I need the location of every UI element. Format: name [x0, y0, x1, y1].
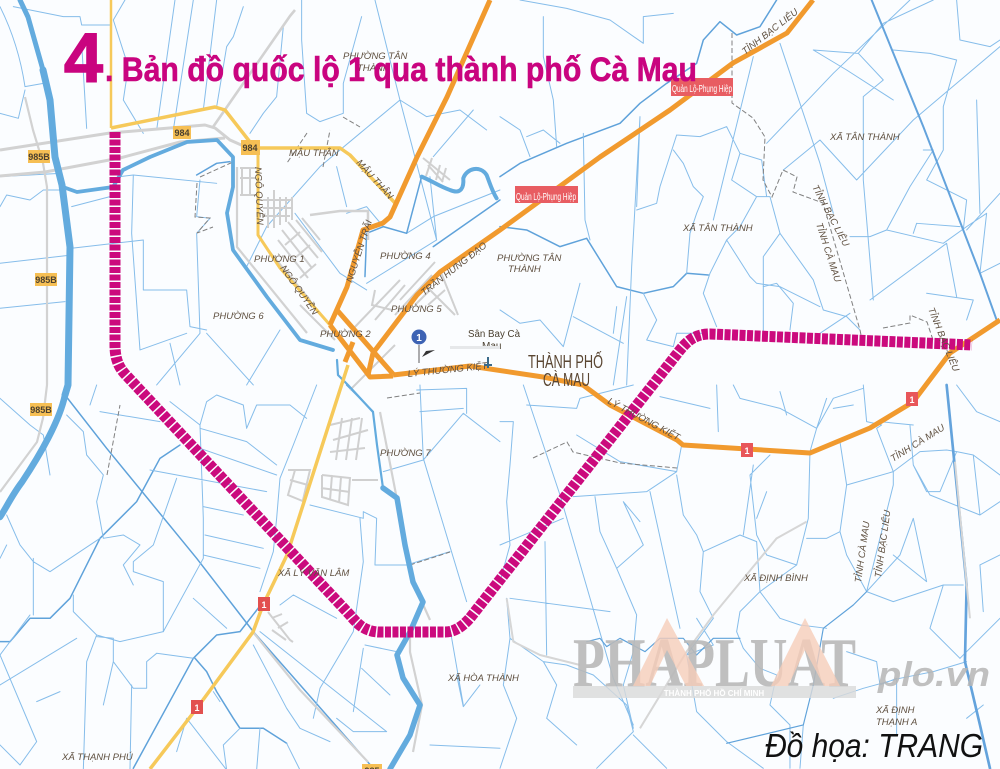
road number shields: [28, 126, 918, 769]
road number shields: 984: [242, 143, 258, 153]
road number shields: 1: [744, 446, 750, 456]
canal network: north-east: [500, 0, 1000, 385]
place labels: PHƯỜNG 1: [254, 254, 305, 265]
red road labels: Quản Lộ-Phụng Hiệp: [672, 84, 732, 95]
main rivers: [0, 0, 423, 769]
place labels: XÃ ĐỊNH: [875, 705, 915, 716]
yellow provincial roads: [111, 0, 395, 769]
place labels: THÀNH: [508, 264, 541, 275]
canal network: north-west: [0, 0, 500, 385]
grey roads: [0, 10, 430, 762]
road number shields: 985B: [35, 275, 57, 285]
watermark logo: Pháp Luật: plo.vn: [877, 656, 990, 694]
canal network: south-west: [0, 385, 500, 769]
place labels: PHƯỜNG 2: [320, 329, 371, 340]
urban street grid: [240, 158, 458, 642]
place labels: TỈNH CÀ MAU: [813, 221, 844, 284]
place labels: THÀNH PHỐ: [528, 351, 603, 372]
place labels: TỈNH CÀ MAU: [852, 520, 873, 583]
title: . Bản đồ quốc lộ 1 qua thành phố Cà Mau: [105, 51, 697, 89]
place labels: PHƯỜNG 5: [391, 304, 442, 315]
place labels: MẬU THÂN: [289, 148, 339, 159]
place labels: NGÔ QUYỀN: [252, 167, 265, 225]
place labels: Sân Bay Cà: [468, 329, 520, 340]
watermark logo: Pháp Luật: PHAPLUAT: [573, 625, 856, 702]
place labels: TỈNH BẠC LIÊU: [809, 183, 852, 249]
place labels: XÃ HÒA THÀNH: [447, 673, 519, 684]
road number shields: 1: [909, 395, 915, 405]
place labels: XÃ ĐỊNH BÌNH: [743, 573, 808, 584]
road number shields: 1: [194, 703, 200, 713]
administrative boundaries (dashed): [107, 33, 950, 565]
road number shields: 985B: [30, 405, 52, 415]
place labels: NGUYỄN TRÃI: [343, 218, 375, 284]
watermark logo: Pháp Luật: THÀNH PHỐ HỒ CHÍ MINH: [664, 688, 764, 698]
icon: location marker 1: 1: [416, 333, 422, 344]
place labels: XÃ LÝ VĂN LÂM: [277, 568, 349, 579]
place labels: MẬU THÂN: [354, 158, 395, 202]
place labels: CÀ MAU: [543, 370, 590, 390]
place labels: THẠNH A: [876, 717, 917, 728]
place labels: PHƯỜNG TÂN: [343, 51, 407, 62]
red road labels: Quản Lộ-Phụng Hiệp: [516, 192, 576, 203]
place labels: XÃ THẠNH PHÚ: [61, 752, 133, 763]
road number shields: 984: [174, 128, 190, 138]
road number shields: 985B: [28, 152, 50, 162]
place labels: LÝ THƯỜNG KIỆT: [606, 396, 683, 444]
place labels: PHƯỜNG 6: [213, 311, 264, 322]
planned bypass route (dashed magenta): [115, 132, 972, 632]
title: [64, 19, 697, 97]
place labels: TỈNH BẠC LIÊU: [925, 306, 962, 373]
place labels: TỈNH BẠC LIÊU: [872, 509, 893, 578]
title: 4: [64, 19, 103, 97]
place labels: TRẦN HƯNG ĐẠO: [419, 240, 490, 298]
place labels: TỈNH BẠC LIÊU: [739, 6, 801, 57]
place labels: LÝ THƯỜNG KIỆT: [407, 361, 489, 380]
place labels: NGÔ QUYỀN: [278, 263, 320, 317]
icon: location marker 1: [412, 330, 435, 363]
credit: Đồ họa: TRANG: [765, 727, 983, 764]
place labels: THÀNH: [357, 63, 390, 74]
road number shields: 1: [261, 600, 267, 610]
icon: airport: [450, 346, 500, 368]
orange national highway 1 and city roads: [330, 0, 1000, 453]
place labels: XÃ TÂN THÀNH: [829, 132, 900, 143]
canal network: south-east: [500, 385, 1000, 768]
place labels: PHƯỜNG 4: [380, 251, 431, 262]
place labels: PHƯỜNG 7: [380, 448, 431, 459]
place labels: TỈNH CÀ MAU: [888, 422, 947, 465]
place labels: PHƯỜNG TÂN: [497, 253, 561, 264]
place labels: Mau: [482, 341, 501, 352]
place labels: XÃ TÂN THÀNH: [682, 223, 753, 234]
red road labels: [515, 78, 733, 203]
